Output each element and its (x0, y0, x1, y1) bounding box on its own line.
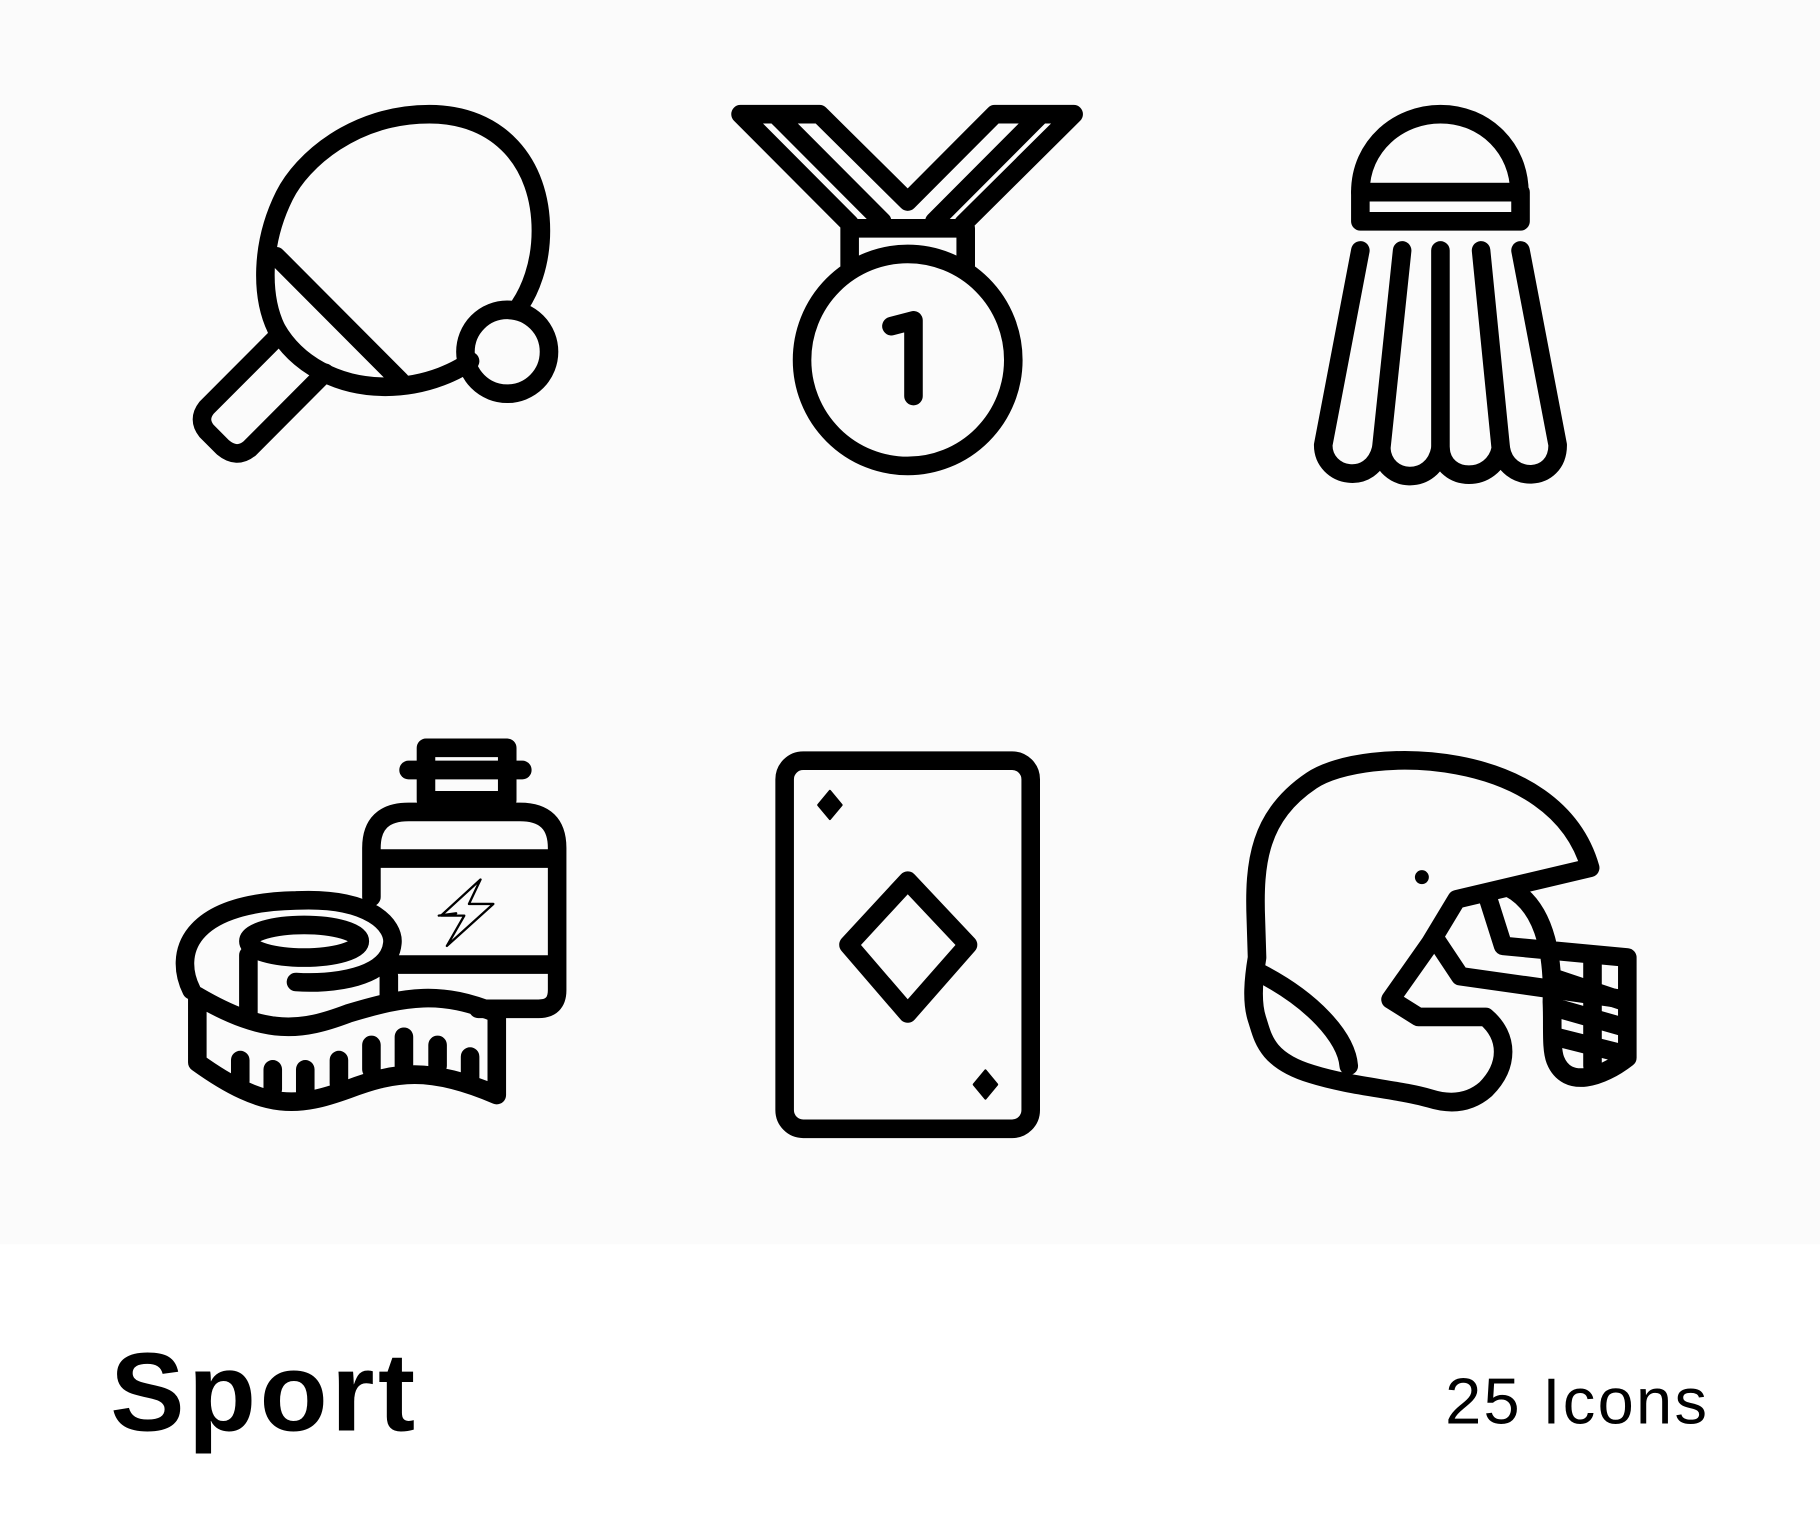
icon: energy drink and tape (185, 748, 557, 1102)
icon: ping pong paddle (202, 114, 549, 453)
icon: playing card (785, 761, 1031, 1129)
title: Sport (110, 1329, 419, 1455)
icon: medal (741, 114, 1074, 466)
icon count: 25 Icons (1445, 1364, 1709, 1438)
icon: football helmet (1254, 760, 1627, 1102)
icon: shuttlecock (1323, 114, 1558, 476)
